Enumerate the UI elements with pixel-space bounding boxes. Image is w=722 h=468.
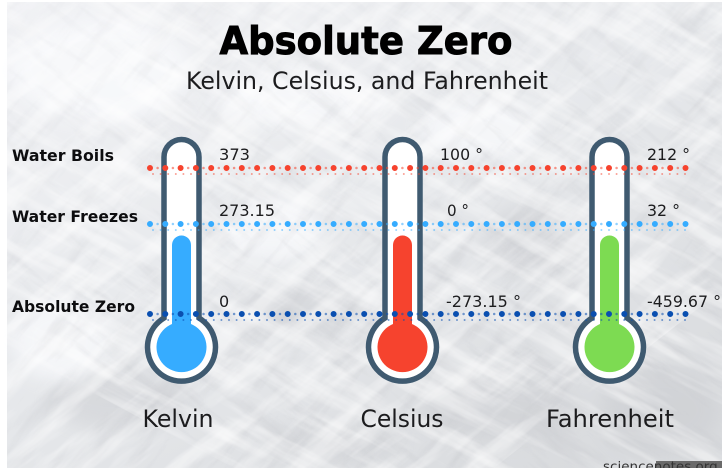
scale label: Kelvin: Kelvin: [142, 405, 214, 433]
Kelvin values: [219, 145, 275, 311]
Kelvin values: 373: [219, 145, 250, 164]
Kelvin values: 273.15: [219, 201, 275, 220]
Celsius values: -273.15 °: [446, 292, 521, 311]
title: Absolute Zero: [220, 19, 512, 63]
Fahrenheit values: [647, 145, 721, 311]
Celsius values: 0 °: [447, 201, 469, 220]
dotted line: water freezes: [150, 224, 692, 230]
thermometer: Fahrenheit: [576, 140, 644, 381]
scale label: Celsius: Celsius: [360, 405, 444, 433]
thermometer: Kelvin: [147, 140, 216, 381]
row label: Water Freezes: Water Freezes: [12, 207, 138, 226]
Fahrenheit values: -459.67 °: [647, 292, 721, 311]
scale label: Fahrenheit: Fahrenheit: [546, 405, 674, 433]
dotted line: water boils: [150, 168, 692, 174]
thermometer: Celsius: [369, 140, 437, 381]
Fahrenheit values: 212 °: [647, 145, 690, 164]
row label: Absolute Zero: Absolute Zero: [12, 297, 135, 316]
subtitle: Kelvin, Celsius, and Fahrenheit: [186, 67, 548, 95]
dotted line: absolute zero: [150, 314, 692, 320]
Kelvin values: 0: [219, 292, 229, 311]
Celsius values: [440, 145, 521, 311]
Celsius values: 100 °: [440, 145, 483, 164]
row label: Water Boils: Water Boils: [12, 146, 114, 165]
Fahrenheit values: 32 °: [647, 201, 680, 220]
